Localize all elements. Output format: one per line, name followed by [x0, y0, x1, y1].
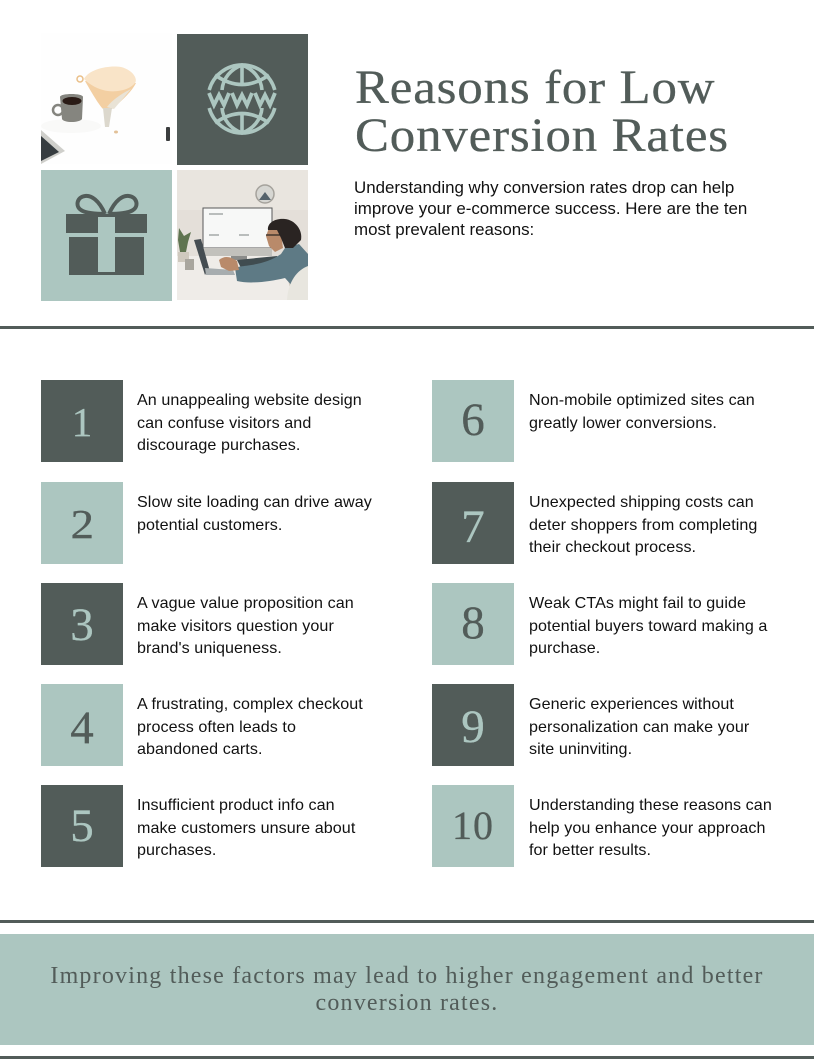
- item 7: their checkout process.: [529, 538, 696, 556]
- footer banner: Improving these factors may lead to higher engagement and better: [50, 963, 764, 989]
- item 5: [41, 785, 356, 867]
- item 1: can confuse visitors and: [137, 414, 311, 432]
- item 6: greatly lower conversions.: [529, 414, 717, 432]
- item 3: A vague value proposition can: [137, 594, 354, 612]
- item 2: [41, 482, 372, 564]
- item 9: 9: [461, 701, 485, 753]
- item 1: 1: [72, 399, 92, 445]
- title: Reasons for Low: [355, 61, 715, 114]
- intro text: most prevalent reasons:: [354, 220, 534, 239]
- item 3: 3: [70, 599, 94, 651]
- item 8: Weak CTAs might fail to guide: [529, 594, 746, 612]
- item 2: potential customers.: [137, 516, 282, 534]
- title: Conversion Rates: [355, 109, 729, 162]
- title: [355, 61, 729, 162]
- item 7: Unexpected shipping costs can: [529, 493, 754, 511]
- item 6: Non-mobile optimized sites can: [529, 391, 755, 409]
- item 4: process often leads to: [137, 718, 296, 736]
- item 8: 8: [461, 597, 485, 649]
- item 1: An unappealing website design: [137, 391, 362, 409]
- item 10: for better results.: [529, 841, 651, 859]
- tile: www globe icon: [177, 34, 308, 165]
- item 10: Understanding these reasons can: [529, 796, 772, 814]
- item 4: [41, 684, 363, 766]
- item 6: [432, 380, 755, 462]
- photo: funnel and coffee on white desk: [41, 66, 170, 164]
- item 10: [432, 785, 772, 867]
- item 5: 5: [70, 800, 94, 852]
- footer banner: [0, 934, 814, 1045]
- intro text: [354, 178, 747, 239]
- intro text: improve your e-commerce success. Here are the ten: [354, 199, 747, 218]
- item 10: help you enhance your approach: [529, 819, 766, 837]
- item 9: site uninviting.: [529, 740, 632, 758]
- item 10: 10: [452, 803, 494, 848]
- item 8: [432, 583, 768, 665]
- intro text: Understanding why conversion rates drop can help: [354, 178, 734, 197]
- item 2: 2: [70, 501, 94, 547]
- item 1: [41, 380, 362, 462]
- item 3: [41, 583, 354, 665]
- item 7: 7: [461, 501, 485, 553]
- item 8: purchase.: [529, 639, 600, 657]
- item 9: personalization can make your: [529, 718, 749, 736]
- footer banner: conversion rates.: [315, 990, 498, 1016]
- tile: gift icon: [41, 170, 172, 301]
- item 7: deter shoppers from completing: [529, 516, 757, 534]
- photo: man working at a computer: [177, 170, 308, 300]
- item 2: Slow site loading can drive away: [137, 493, 372, 511]
- item 3: brand's uniqueness.: [137, 639, 282, 657]
- item 5: Insufficient product info can: [137, 796, 335, 814]
- item 3: make visitors question your: [137, 617, 334, 635]
- item 4: 4: [70, 702, 94, 754]
- item 4: abandoned carts.: [137, 740, 262, 758]
- item 8: potential buyers toward making a: [529, 617, 767, 635]
- item 9: [432, 684, 749, 766]
- item 6: 6: [461, 394, 485, 446]
- item 5: make customers unsure about: [137, 819, 355, 837]
- item 5: purchases.: [137, 841, 216, 859]
- item 4: A frustrating, complex checkout: [137, 695, 363, 713]
- item 7: [432, 482, 757, 564]
- item 9: Generic experiences without: [529, 695, 734, 713]
- item 1: discourage purchases.: [137, 436, 300, 454]
